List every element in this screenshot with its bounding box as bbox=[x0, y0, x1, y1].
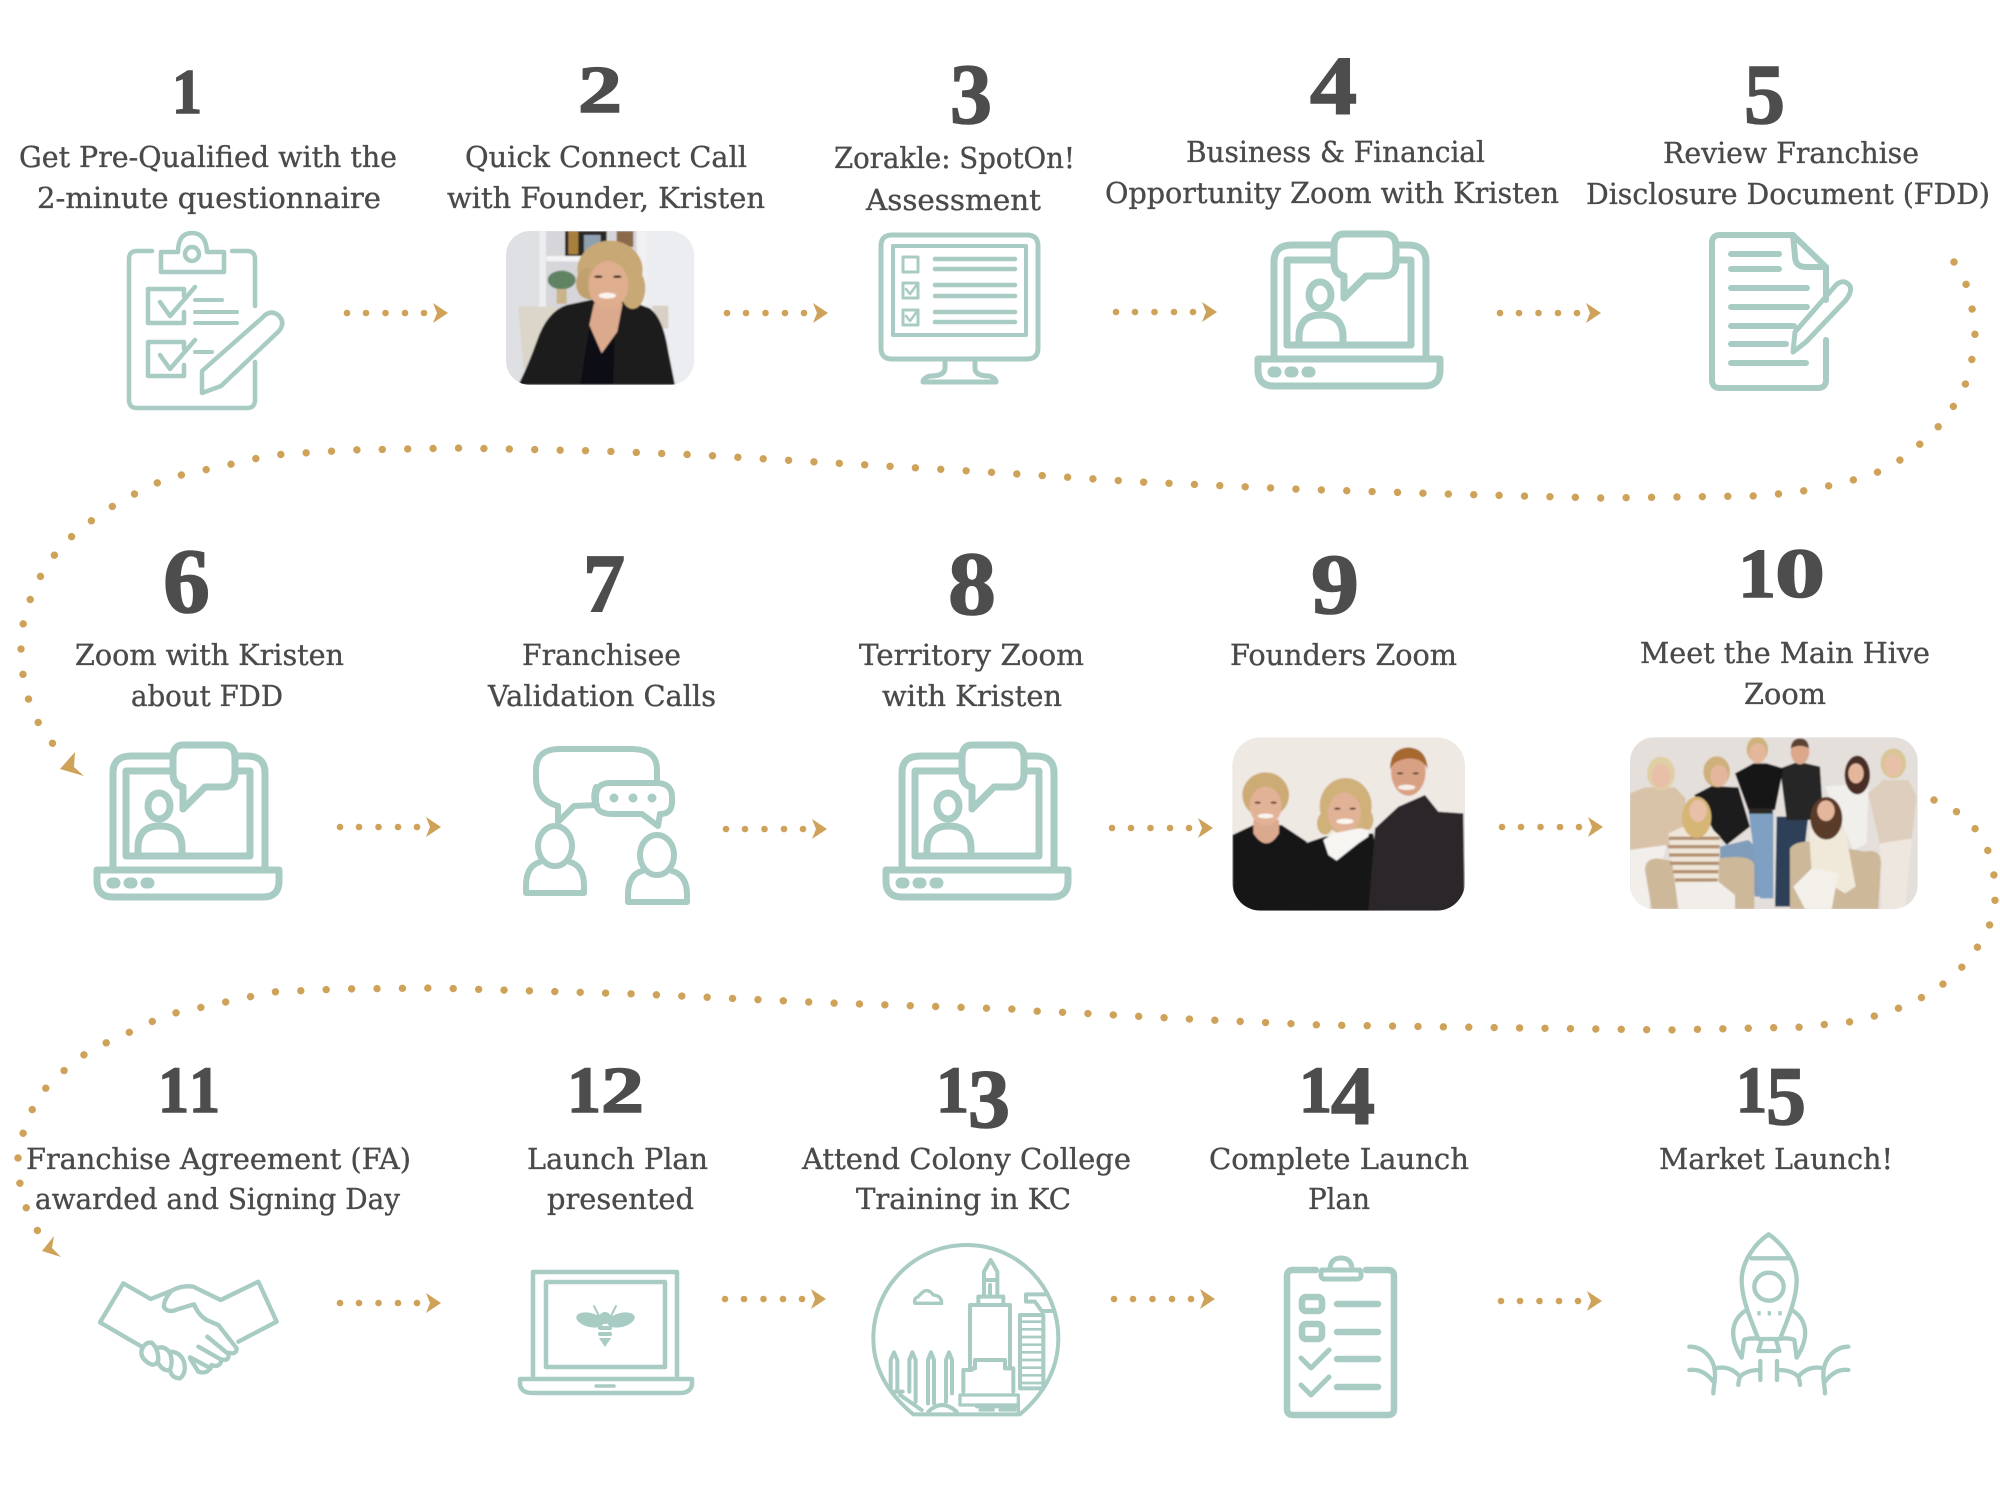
step 9 bbox=[1231, 556, 1465, 911]
icon: clipboard checklist bbox=[1287, 1258, 1394, 1415]
caption 2: with Founder, Kristen bbox=[447, 181, 765, 215]
caption 14: Complete Launch bbox=[1209, 1142, 1469, 1176]
number 6: 6 bbox=[163, 530, 210, 632]
caption 13 bbox=[801, 1142, 1131, 1216]
step 6 bbox=[75, 530, 344, 897]
caption 7: Validation Calls bbox=[487, 679, 716, 713]
photo: Main Hive team bbox=[1630, 737, 1918, 909]
bee bbox=[575, 1310, 636, 1347]
step 8 bbox=[859, 535, 1084, 897]
step 4 bbox=[1105, 40, 1559, 386]
number 11 bbox=[158, 1054, 220, 1127]
number 5: 5 bbox=[1744, 46, 1785, 142]
icon: document with pencil bbox=[1712, 235, 1850, 388]
number 12: 1 bbox=[567, 1054, 601, 1127]
caption 2: Quick Connect Call bbox=[465, 140, 747, 174]
caption 11: Franchise Agreement (FA) bbox=[26, 1142, 411, 1176]
caption 1 bbox=[19, 140, 397, 215]
photo: founder Kristen bbox=[506, 231, 694, 385]
number 14 bbox=[1299, 1050, 1375, 1143]
number 15 bbox=[1736, 1050, 1806, 1143]
caption 7: Franchisee bbox=[522, 638, 681, 672]
caption 8: with Kristen bbox=[882, 679, 1062, 713]
caption 10: Meet the Main Hive bbox=[1640, 636, 1930, 670]
number 7: 7 bbox=[583, 537, 625, 629]
caption 11: awarded and Signing Day bbox=[35, 1182, 401, 1216]
caption 15: Market Launch! bbox=[1659, 1142, 1893, 1176]
icon: Kansas City skyline in circle bbox=[873, 1245, 1058, 1414]
number 2: 2 bbox=[578, 53, 622, 127]
caption 3: Zorakle: SpotOn! bbox=[834, 141, 1075, 175]
number 10: 1 bbox=[1738, 536, 1776, 613]
caption 14 bbox=[1209, 1142, 1469, 1216]
icon: laptop video call bbox=[886, 745, 1068, 897]
icon: rocket launch bbox=[1689, 1234, 1848, 1393]
caption 6 bbox=[75, 638, 344, 713]
caption 4: Opportunity Zoom with Kristen bbox=[1105, 176, 1559, 210]
caption 12 bbox=[527, 1142, 708, 1216]
icon: two people with chat bubbles bbox=[526, 749, 687, 902]
caption 14: Plan bbox=[1308, 1182, 1370, 1216]
caption 11 bbox=[26, 1142, 411, 1216]
number 9: 9 bbox=[1311, 536, 1359, 632]
caption 8: Territory Zoom bbox=[859, 638, 1084, 672]
number 12 bbox=[567, 1054, 644, 1127]
caption 13: Attend Colony College bbox=[801, 1142, 1131, 1176]
step 10 bbox=[1625, 536, 1930, 917]
caption 5: Disclosure Document (FDD) bbox=[1586, 177, 1990, 211]
caption 2 bbox=[447, 140, 765, 215]
number 1: 1 bbox=[172, 56, 202, 127]
icon: clipboard checklist with pencil bbox=[129, 233, 282, 408]
caption 13: Training in KC bbox=[856, 1182, 1071, 1216]
caption 10: Zoom bbox=[1744, 677, 1826, 711]
step 15 bbox=[1659, 1050, 1893, 1393]
step 2 bbox=[447, 53, 765, 392]
icon: monitor with checklist bbox=[881, 235, 1038, 382]
icon: laptop video call bbox=[1258, 234, 1440, 386]
step 1 bbox=[19, 56, 397, 408]
caption 4: Business & Financial bbox=[1186, 135, 1485, 169]
icon: laptop with bee bbox=[520, 1272, 692, 1393]
number 12: 2 bbox=[601, 1054, 644, 1127]
caption 5 bbox=[1586, 136, 1990, 211]
step arrows bbox=[337, 302, 1603, 1313]
number 11: 1 bbox=[189, 1054, 220, 1127]
caption 6: about FDD bbox=[131, 679, 283, 713]
number 15: 5 bbox=[1766, 1050, 1806, 1143]
number 15: 1 bbox=[1736, 1054, 1767, 1127]
caption 4 bbox=[1105, 135, 1559, 210]
caption 7 bbox=[487, 638, 716, 713]
number 13 bbox=[936, 1053, 1010, 1146]
number 10: 0 bbox=[1775, 536, 1825, 613]
number 13: 3 bbox=[968, 1053, 1010, 1146]
step 12 bbox=[520, 1054, 708, 1393]
caption 1: 2-minute questionnaire bbox=[37, 181, 381, 215]
caption 6: Zoom with Kristen bbox=[75, 638, 344, 672]
step 14 bbox=[1209, 1050, 1469, 1415]
number 11: 1 bbox=[158, 1054, 189, 1127]
number 13: 1 bbox=[936, 1054, 969, 1127]
step 7 bbox=[487, 537, 716, 902]
icon: handshake bbox=[100, 1282, 277, 1378]
caption 3 bbox=[834, 141, 1075, 217]
step 5 bbox=[1586, 46, 1990, 388]
number 4: 4 bbox=[1310, 40, 1357, 133]
caption 5: Review Franchise bbox=[1663, 136, 1919, 170]
step 3 bbox=[834, 46, 1075, 382]
caption 3: Assessment bbox=[865, 183, 1041, 217]
step 13 bbox=[801, 1053, 1131, 1414]
caption 1: Get Pre-Qualified with the bbox=[19, 140, 397, 174]
number 14: 4 bbox=[1331, 1050, 1375, 1143]
caption 9: Founders Zoom bbox=[1230, 638, 1457, 672]
caption 12: presented bbox=[547, 1182, 694, 1216]
number 8: 8 bbox=[948, 535, 996, 634]
caption 8 bbox=[859, 638, 1084, 713]
caption 10 bbox=[1640, 636, 1930, 711]
number 14: 1 bbox=[1299, 1054, 1332, 1127]
dotted connector: row 1 to row 2 bbox=[21, 262, 1975, 776]
step 11 bbox=[26, 1054, 411, 1378]
photo: three founders bbox=[1232, 738, 1465, 911]
number 10 bbox=[1738, 536, 1825, 613]
icon: laptop video call bbox=[97, 745, 279, 897]
caption 12: Launch Plan bbox=[527, 1142, 708, 1176]
number 3: 3 bbox=[950, 46, 992, 142]
dotted connector: row 2 to row 3 bbox=[18, 800, 1995, 1257]
